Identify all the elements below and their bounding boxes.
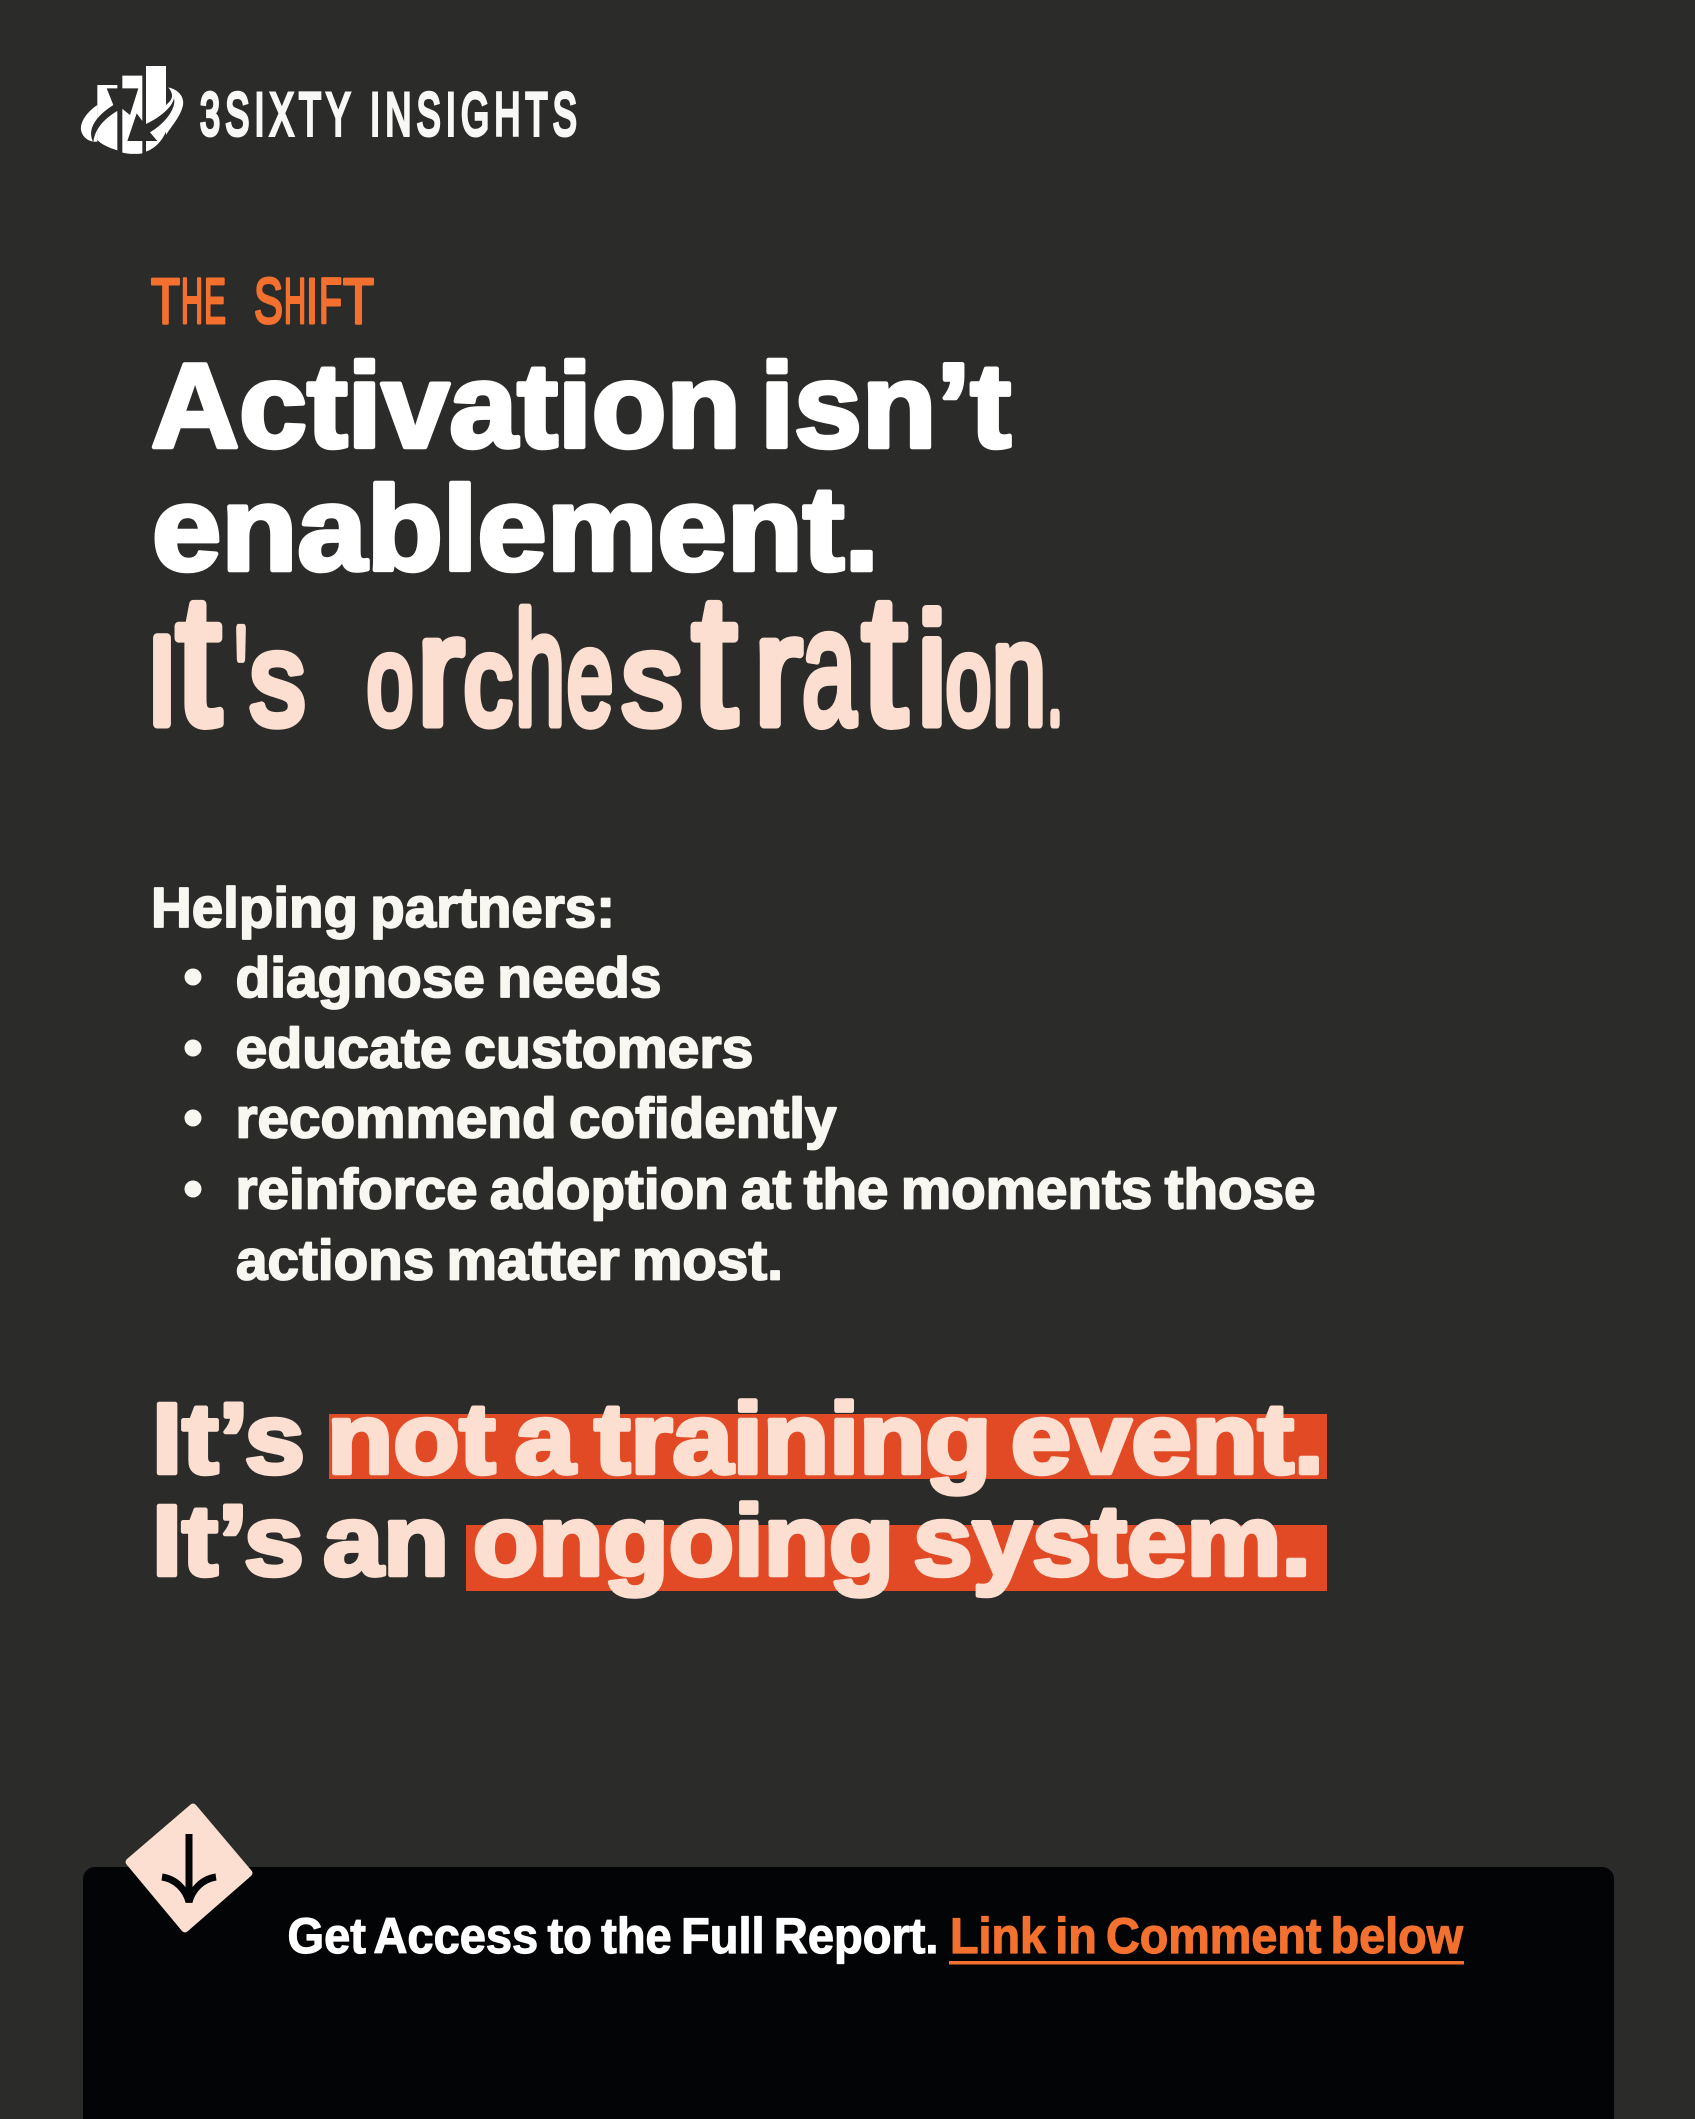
handwritten headline line 3: o (946, 612, 991, 751)
eyebrow: THE SHIFT: H (284, 265, 306, 337)
headline line 1: Activation isn’t (151, 339, 1011, 473)
handwritten headline line 3: r (417, 584, 464, 757)
handwritten headline line 3: c (464, 612, 512, 751)
handwritten headline line 3: ' (235, 599, 247, 754)
handwritten headline line 3: n (992, 593, 1046, 755)
handwritten headline line 3: i (917, 582, 947, 758)
handwritten headline line 3: t (692, 558, 737, 764)
handwritten headline line 3: s (622, 606, 682, 752)
handwritten headline line 3: I (147, 612, 177, 751)
panel: call to action (83, 1804, 1614, 2119)
icon: logo mark (80, 66, 184, 154)
eyebrow: THE SHIFT: F (319, 265, 342, 337)
eyebrow: THE SHIFT: T (151, 265, 180, 337)
headline line 2: enablement. (152, 462, 879, 596)
handwritten headline line 3: s (250, 606, 305, 752)
handwritten headline line 3: . (1048, 634, 1062, 746)
callout line 1: It’s (152, 1383, 305, 1495)
handwritten headline line 3: o (367, 612, 413, 751)
call to action text: Get Access to the Full Report. (288, 1908, 938, 1964)
logo: 3SIXTY Insights (81, 66, 577, 154)
icon: diamond down arrow (126, 1804, 252, 1932)
handwritten headline line 3: t (176, 558, 221, 764)
handwritten headline line 3: t (862, 558, 907, 764)
callout line 1: not a training event. (327, 1383, 1324, 1495)
logo wordmark: 3SIXTY INSIGHTS (200, 82, 577, 148)
handwritten headline line 3: e (567, 602, 613, 753)
bullet: educate customers: educate customers (236, 1016, 754, 1080)
handwritten headline line 3: r (754, 584, 802, 757)
bullet: reinforce adoption: reinforce adoption at the moments those (236, 1158, 1316, 1222)
eyebrow: THE SHIFT: S (254, 265, 283, 337)
handwritten headline line 3: a (802, 575, 856, 759)
bullet: diagnose needs: diagnose needs (236, 946, 662, 1010)
callout: not a training event, ongoing system (152, 1383, 1327, 1597)
callout line 2 (152, 1485, 1327, 1597)
list heading: Helping partners: (151, 876, 615, 940)
headline (147, 339, 1062, 764)
eyebrow: THE SHIFT: I (306, 265, 318, 337)
bullet: reinforce adoption: actions matter most. (236, 1228, 783, 1292)
callout line 2: ongoing system. (473, 1485, 1311, 1597)
eyebrow: THE SHIFT: T (343, 265, 374, 337)
eyebrow: THE SHIFT: E (204, 265, 226, 337)
eyebrow: THE SHIFT: H (181, 265, 203, 337)
handwritten headline line 3: h (515, 579, 565, 758)
bullet: recommend cofidently: recommend cofidently (236, 1086, 837, 1150)
bullet: reinforce adoption (184, 1158, 1316, 1292)
link text: Link in Comment below (950, 1908, 1463, 1964)
text block: helping partners list (151, 876, 1316, 1292)
callout line 2: It’s an (152, 1485, 449, 1597)
